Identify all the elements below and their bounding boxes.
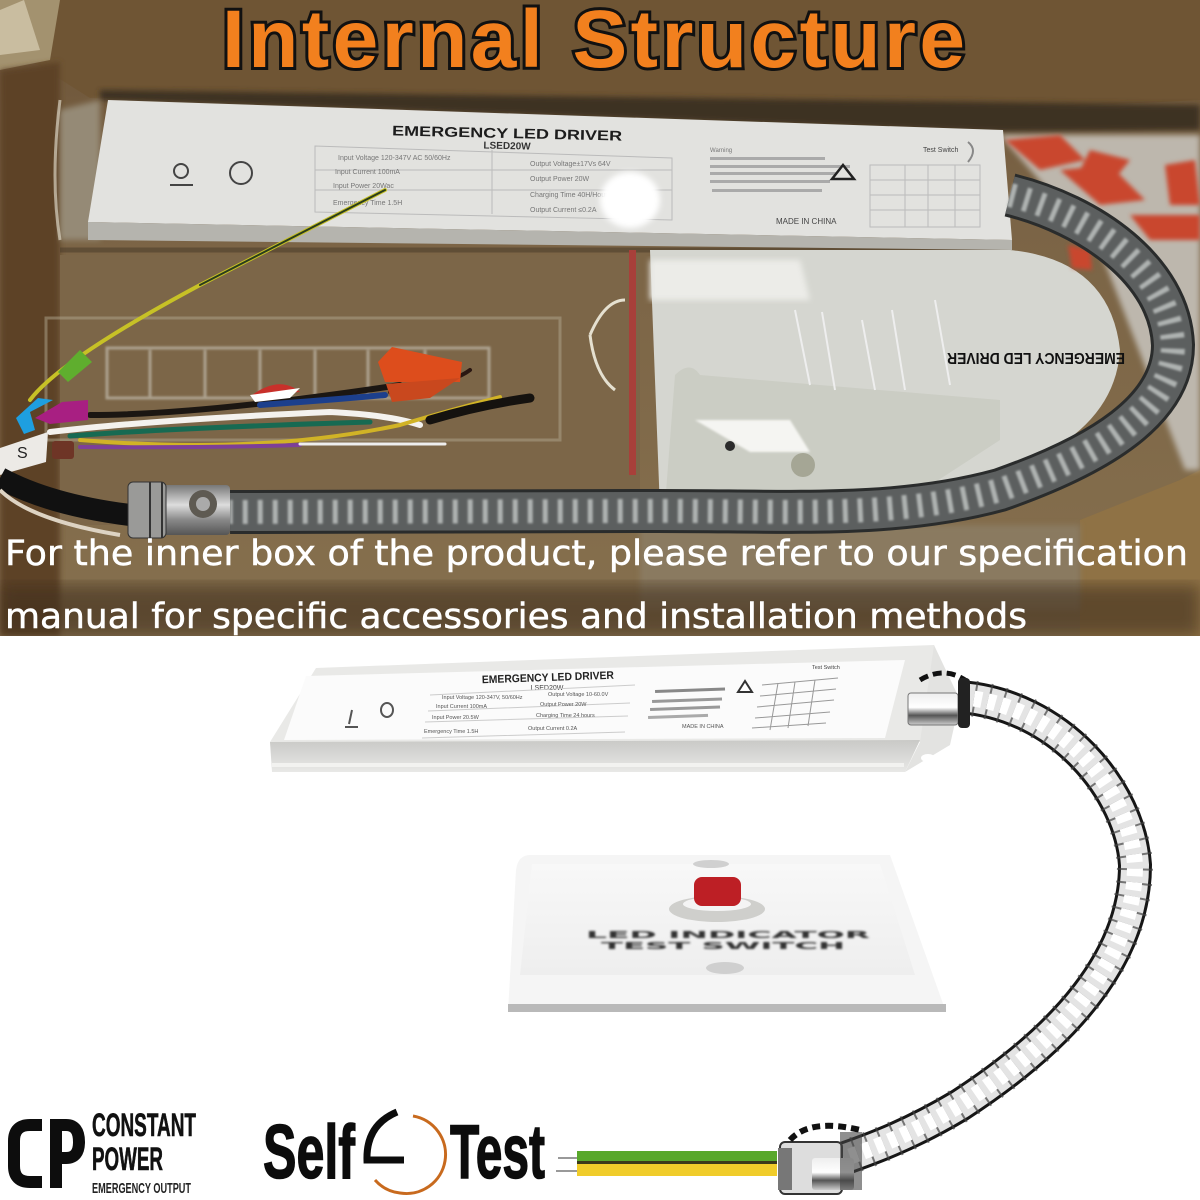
driver specs: Input Current 100mA	[436, 704, 487, 710]
spec table: Input Current 100mA	[335, 169, 400, 176]
right label warnings: MADE IN CHINA	[776, 217, 837, 226]
mirrored box print: EMERGENCY LED DRIVER	[947, 349, 1125, 366]
cardboard flaps	[0, 0, 1200, 636]
logo: constant power	[14, 1107, 196, 1197]
conduit connector	[128, 482, 230, 538]
red tape strip	[629, 250, 636, 475]
lower connector	[778, 1126, 862, 1194]
spec table: Output Power 20W	[530, 176, 590, 183]
driver box in bag	[88, 100, 1012, 250]
driver specs	[422, 665, 840, 738]
model: LSED20W	[483, 140, 531, 153]
driver specs: Input Voltage 120-347V, 50/60Hz	[442, 695, 523, 701]
driver label title: EMERGENCY LED DRIVER	[482, 670, 614, 686]
wire labels and sleeves	[0, 350, 300, 535]
logo: constant power: EMERGENCY OUTPUT	[92, 1180, 191, 1197]
panel: product cutout on white	[0, 636, 1200, 1200]
caption: manual for specific accessories and installation methods	[5, 597, 1027, 637]
right label warnings: Test Switch	[923, 147, 959, 154]
spec table: Output Current ≤0.2A	[530, 207, 597, 214]
orange wire connector	[378, 347, 462, 402]
driver icons	[345, 703, 393, 727]
caption: For the inner box of the product, please refer to our specification	[5, 534, 1188, 574]
driver specs: Output Current 0.2A	[528, 726, 578, 732]
spec table	[315, 146, 672, 220]
driver specs: Charging Time 24 hours	[536, 713, 595, 719]
plastic blister tray	[46, 100, 1200, 610]
switch text	[586, 930, 871, 952]
switch text: TEST SWITCH	[601, 941, 845, 952]
right label warnings: Warning	[710, 148, 732, 154]
red test button	[669, 877, 765, 922]
wires bundle	[30, 190, 530, 447]
driver specs: Output Power 20W	[540, 702, 587, 708]
caption	[5, 534, 1188, 637]
clear dome with white accessories	[590, 250, 1125, 510]
driver connector	[908, 673, 970, 728]
spec table: Output Voltage±17Vs 64V	[530, 161, 611, 168]
driver specs: Emergency Time 1.5H	[424, 729, 478, 735]
self word: Self	[263, 1110, 355, 1195]
test switch plate	[508, 855, 946, 1012]
panel: product photo in box	[0, 0, 1200, 637]
icon: CP mark	[14, 1125, 79, 1188]
spec table: Input Voltage 120-347V AC 50/60Hz	[338, 155, 451, 162]
spec table: Input Power 20Wac	[333, 183, 394, 190]
spec table: Emergency Time 1.5H	[333, 200, 402, 207]
right label warnings	[710, 142, 980, 227]
label title: EMERGENCY LED DRIVER	[392, 122, 622, 144]
driver specs: Input Power 20.5W	[432, 715, 480, 721]
caption band	[0, 585, 1200, 636]
driver specs: Test Switch	[812, 665, 840, 671]
logo: self test	[263, 1110, 545, 1195]
metal flexible conduit	[230, 195, 1173, 512]
icon: circular test arrow	[367, 1112, 446, 1194]
logo: constant power: POWER	[92, 1141, 163, 1177]
driver specs: MADE IN CHINA	[682, 724, 724, 730]
logo words: CONSTANT	[92, 1107, 196, 1143]
driver specs: Output Voltage 10-60.0V	[548, 692, 609, 698]
lower metal conduit	[825, 697, 1135, 1165]
spec table: Charging Time 40H/Hours	[530, 192, 611, 199]
switch text: LED INDICATOR	[586, 930, 871, 941]
driver model: LSED20W	[531, 685, 564, 692]
wire labels and sleeves: S	[17, 445, 28, 462]
green and yellow lead wires	[556, 1151, 777, 1176]
certification marks	[170, 162, 252, 185]
orange wire nuts pile	[1005, 135, 1200, 270]
test word: Test	[450, 1110, 545, 1195]
driver box	[270, 645, 960, 772]
